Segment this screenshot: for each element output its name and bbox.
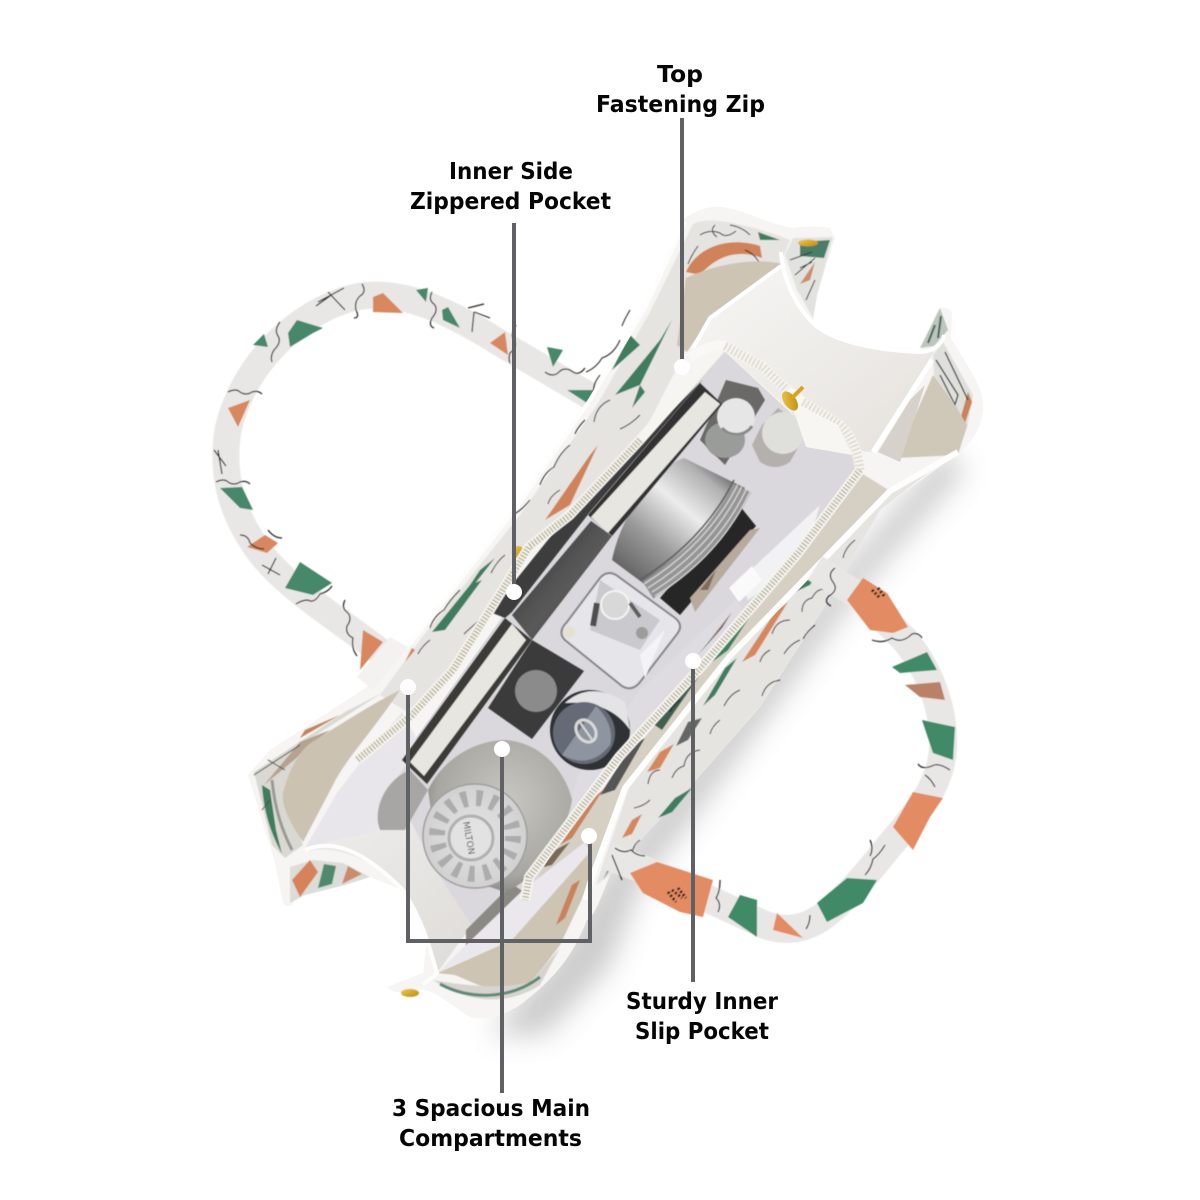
label: 3 spacious main compartments: Compartments — [399, 1126, 582, 1152]
label: 3 spacious main compartments — [392, 1096, 590, 1152]
leader: spacious main compartments bracket — [400, 679, 597, 1093]
left lavender lining — [305, 712, 420, 848]
small jar left — [705, 398, 755, 458]
bottom right lavender lining — [437, 842, 590, 973]
bottle cap: MILTON — [460, 821, 476, 856]
label: inner side zippered pocket: Zippered Pocket — [410, 189, 611, 215]
label: inner side zippered pocket: Inner Side — [449, 159, 573, 185]
back panel print — [380, 221, 790, 715]
bottle body — [428, 740, 572, 892]
bag body silhouette — [248, 207, 983, 1018]
dark gap bottom — [466, 884, 524, 948]
bag drop shadow — [490, 450, 965, 1035]
jar contents — [660, 505, 760, 615]
gold snap left — [512, 546, 524, 558]
label: sturdy inner slip pocket: Slip Pocket — [635, 1019, 769, 1045]
leader: sturdy inner slip pocket — [685, 653, 701, 982]
label: 3 spacious main compartments: 3 Spacious Main — [392, 1096, 590, 1122]
book lower — [402, 618, 532, 784]
top white lining — [693, 252, 944, 462]
black pouch — [512, 521, 612, 640]
bag white edges — [305, 222, 958, 985]
zipper right side and top — [525, 345, 860, 900]
left handle tab — [357, 637, 408, 690]
slip pocket brown contents — [698, 612, 732, 655]
paper tab and slip pocket insert — [729, 505, 820, 602]
zip flap — [790, 400, 852, 455]
zip puller gold — [779, 387, 803, 413]
jar dark backing — [700, 380, 765, 465]
black compact box — [488, 640, 584, 739]
front inner strip between zip and edge — [530, 471, 890, 890]
label: sturdy inner slip pocket — [626, 989, 779, 1045]
leader: inner side zippered pocket — [506, 223, 522, 600]
right beige lining — [896, 375, 967, 458]
label: top fastening zip: Top — [657, 62, 703, 88]
label: inner side zippered pocket — [410, 159, 611, 215]
metal jar lid — [640, 480, 750, 596]
metal jar body — [612, 458, 745, 592]
dark binder strip — [490, 380, 703, 618]
bottom white lining flap — [303, 823, 472, 973]
bottle cap — [423, 784, 527, 888]
label: sturdy inner slip pocket: Sturdy Inner — [626, 989, 779, 1015]
pill tin — [561, 573, 680, 688]
book upper — [588, 383, 722, 536]
round compact — [550, 690, 630, 770]
label: top fastening zip: Fastening Zip — [596, 92, 765, 118]
back handle — [214, 284, 595, 670]
top corner print with snap — [785, 237, 948, 348]
small jar right — [752, 408, 808, 467]
right corner print — [933, 342, 973, 452]
interior compartment — [375, 350, 858, 935]
leader: top fastening zip — [674, 118, 690, 375]
glass jar behind bottle — [378, 770, 428, 830]
top beige lining — [677, 261, 782, 352]
bottom beige lining — [437, 850, 590, 990]
left beige lining — [283, 690, 400, 842]
front print panel — [596, 452, 955, 885]
bottom gold snap — [401, 989, 419, 997]
zipper left side — [357, 347, 722, 760]
slip pocket — [560, 600, 745, 842]
front handle — [608, 568, 955, 938]
bottom print — [433, 880, 580, 999]
label: top fastening zip — [596, 62, 765, 118]
left wing print — [254, 693, 382, 903]
